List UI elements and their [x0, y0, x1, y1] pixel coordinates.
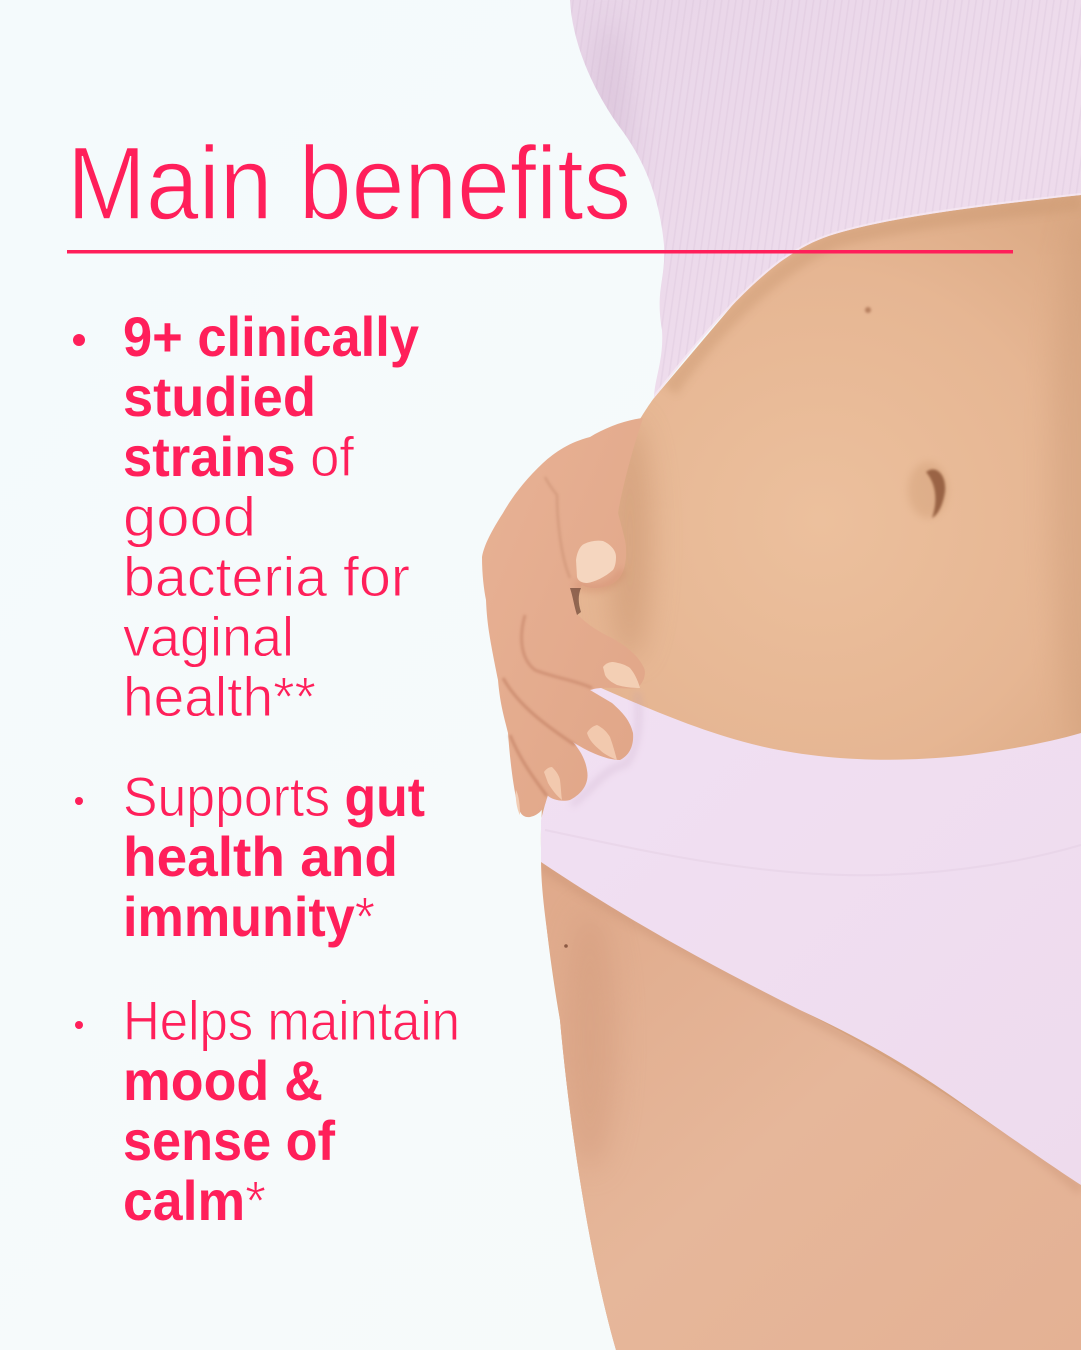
- hand silhouette: [482, 418, 645, 817]
- bullet dot: [73, 334, 85, 346]
- gap shadow: [570, 588, 581, 615]
- thigh: [541, 860, 1081, 1350]
- thumb tip shading: [575, 570, 623, 588]
- line: bacteria for: bacteria for: [123, 545, 410, 608]
- index nail: [603, 662, 640, 688]
- torso shading: [541, 200, 1081, 1190]
- ring nail: [544, 767, 562, 800]
- waistband seam: [545, 830, 1081, 875]
- bullet 3: mood and calm: [75, 989, 460, 1232]
- index and middle finger separator: [522, 615, 592, 688]
- navel: [908, 462, 948, 518]
- hand: [482, 418, 645, 817]
- line: good: good: [123, 485, 256, 548]
- bullet dot: [75, 1021, 83, 1029]
- thumb and palm crease: [545, 477, 570, 578]
- line: health**: health**: [123, 665, 316, 728]
- line: sense of: sense of: [123, 1109, 335, 1172]
- bullet 1: clinically studied strains: [73, 305, 419, 728]
- bullet 2: gut health and immunity: [75, 765, 425, 948]
- line: Helps maintain: Helps maintain: [123, 989, 460, 1052]
- moles: [865, 307, 871, 313]
- line: Supports gut: Supports gut: [123, 765, 425, 828]
- thumbnail: [576, 541, 616, 583]
- line: health and: health and: [123, 825, 398, 888]
- line: strains of: strains of: [123, 425, 354, 488]
- line: 9+ clinically: 9+ clinically: [123, 305, 419, 368]
- photo: torso with lilac underwear and hand on hip: [482, 0, 1081, 1350]
- little nail: [516, 790, 520, 815]
- title: Main benefits: [67, 126, 631, 242]
- finger contact shadow: [572, 692, 639, 805]
- bullet dot: [75, 797, 83, 805]
- line: vaginal: vaginal: [123, 605, 294, 668]
- cropped top: [570, 0, 1081, 398]
- ring and little finger separator: [510, 735, 547, 796]
- line: studied: studied: [123, 365, 316, 428]
- middle and ring finger separator: [503, 678, 575, 745]
- middle nail: [587, 725, 617, 760]
- line: mood &: mood &: [123, 1049, 323, 1112]
- title rule: [67, 250, 1013, 254]
- underwear: [541, 684, 1081, 1185]
- torso skin: [539, 190, 1081, 1350]
- line: calm*: calm*: [123, 1169, 266, 1232]
- line: immunity*: immunity*: [123, 885, 375, 948]
